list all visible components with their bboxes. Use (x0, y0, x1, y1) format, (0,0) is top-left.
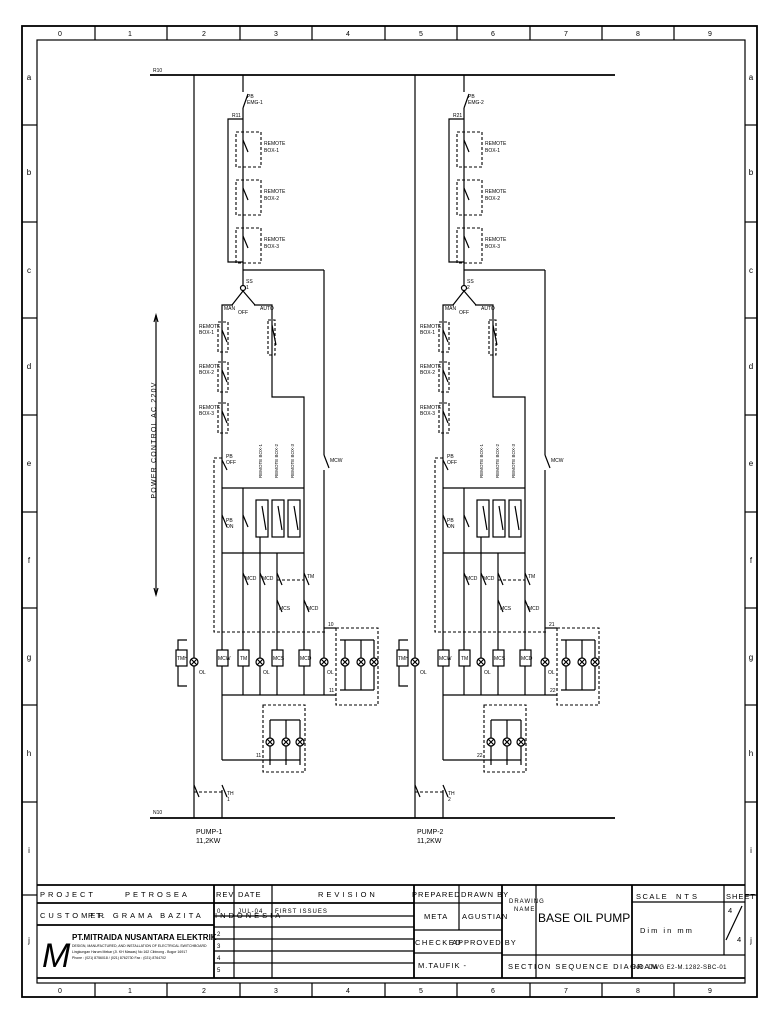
circuit: pump 2: MCD (528, 606, 540, 612)
circuit: pump 2: AUTO (481, 306, 495, 312)
circuit: pump 2: REMOTE BOX-2 (495, 443, 500, 478)
circuit: pump 2: OFF (459, 310, 469, 316)
circuit: pump 1: MCW (330, 458, 343, 464)
grid labels bottom: 3 (274, 988, 278, 995)
grid labels bottom: 0 (58, 988, 62, 995)
grid labels top: 0 (58, 31, 62, 38)
circuit: pump 2: OL (420, 670, 427, 676)
grid labels bottom: 5 (419, 988, 423, 995)
circuit: pump 2: REMOTE (420, 405, 442, 411)
circuit: pump 2: BOX-2 (485, 196, 500, 202)
circuit: pump 1: MCD (245, 576, 257, 582)
grid labels bottom: 4 (346, 988, 350, 995)
circuit: pump 2: 21 (549, 622, 555, 628)
logo (42, 933, 217, 975)
circuit: pump 2: MCD (521, 656, 533, 662)
title block: 4 (217, 956, 221, 962)
grid labels left: b (27, 168, 32, 177)
title block: JUL-04 (238, 909, 263, 915)
circuit: pump 1: PB (247, 94, 254, 100)
grid labels left: c (27, 266, 31, 275)
circuit: pump 2: BOX-3 (485, 244, 500, 250)
grid labels left: j (27, 936, 30, 945)
title block: 5 (217, 968, 221, 974)
circuit: pump 1: MCW (218, 656, 231, 662)
title block: NO. DWG E2-M.1282-SBC-01 (634, 965, 727, 971)
title block: DRAWING (509, 899, 545, 905)
title block: SHEET (726, 892, 756, 901)
circuit: pump 2: OL (548, 670, 555, 676)
circuit: pump 1: BOX-3 (264, 244, 279, 250)
circuit: pump 1: REMOTE (199, 405, 221, 411)
circuit: pump 2: 11,2KW (417, 838, 442, 845)
circuit: pump 2: REMOTE (420, 324, 442, 330)
circuit: pump 2: 22 (477, 753, 483, 759)
grid labels right: d (749, 362, 753, 371)
title block: DATE (238, 890, 261, 899)
circuit: pump 1: 1 (246, 285, 249, 291)
grid labels left: f (28, 556, 31, 565)
circuit: pump 2: R21 (453, 113, 462, 119)
bus bars: N10 (153, 810, 162, 816)
circuit: pump 1: REMOTE (264, 189, 286, 195)
grid labels right: j (749, 936, 752, 945)
circuit: pump 1: REMOTE (199, 364, 221, 370)
circuit: pump 2: OL (484, 670, 491, 676)
circuit: pump 2: MCS (494, 656, 506, 662)
title block: APPROVED BY (452, 938, 517, 947)
circuit: pump 2: PB (468, 94, 475, 100)
circuit: pump 1: REMOTE BOX-3 (290, 443, 295, 478)
circuit: pump 1: 10 (328, 622, 334, 628)
logo: Lingkungan Harum Mekar (Jl. KH Mawas) No 162 Cibinong - Bogor 16917 (72, 950, 187, 954)
grid labels right: h (749, 749, 753, 758)
circuit: pump 2: REMOTE (485, 237, 507, 243)
circuit: pump 2: REMOTE (485, 189, 507, 195)
circuit: pump 1: REMOTE BOX-1 (258, 443, 263, 478)
title block: REVISION (318, 890, 378, 899)
grid labels right: a (749, 73, 754, 82)
title block: 3 (217, 944, 221, 950)
grid labels top: 5 (419, 31, 423, 38)
circuit: pump 1: EMG-1 (247, 100, 263, 106)
title block: SECTION SEQUENCE DIAGRAM (508, 962, 659, 971)
circuit: pump 2: PB (447, 454, 454, 460)
grid labels left (27, 73, 32, 945)
grid labels top: 8 (636, 31, 640, 38)
circuit: pump 2: MCW (439, 656, 452, 662)
title block: CUSTOMER (40, 911, 107, 920)
grid labels right (749, 73, 754, 945)
circuit: pump 2: REMOTE BOX-3 (511, 443, 516, 478)
circuit: pump 2: TM (528, 574, 535, 580)
circuit: pump 1: MCD (307, 606, 319, 612)
circuit: pump 1: REMOTE (264, 237, 286, 243)
circuit: pump 2: PB (447, 518, 454, 524)
circuit: pump 1: MCD (262, 576, 274, 582)
circuit: pump 1: MCS (273, 656, 285, 662)
circuit: pump 1: MAN (224, 306, 236, 312)
circuit: pump 2: BOX-2 (420, 370, 435, 376)
title block: META (424, 912, 448, 921)
grid labels right: i (750, 846, 752, 855)
circuit: pump 1: AUTO (260, 306, 274, 312)
title block: AGUSTIAN (462, 912, 508, 921)
circuit: pump 1: 11 (329, 688, 334, 694)
title block: DRAWN BY (461, 890, 509, 899)
grid labels left: e (27, 459, 32, 468)
circuit: pump 1: REMOTE (264, 141, 286, 147)
circuit: pump 1: PUMP-1 (196, 829, 223, 836)
circuit: pump 2: REMOTE BOX-1 (479, 443, 484, 478)
grid labels top: 9 (708, 31, 712, 38)
title block: 0 (217, 909, 221, 915)
grid labels top: 3 (274, 31, 278, 38)
grid labels left: g (27, 653, 31, 662)
circuit: pump 2: MCD (466, 576, 478, 582)
grid labels right: b (749, 168, 754, 177)
circuit: pump 1: BOX-3 (199, 411, 214, 417)
title block: INDONESIA (215, 911, 283, 920)
circuit: pump 1: BOX-2 (199, 370, 214, 376)
grid labels top: 2 (202, 31, 206, 38)
circuit: pump 2: SS (467, 279, 474, 285)
circuit: pump 1: 11,2KW (196, 838, 221, 845)
title block (37, 885, 756, 978)
circuit: pump 2: MCS (500, 606, 512, 612)
grid labels bottom: 1 (128, 988, 132, 995)
title block: 4 (728, 906, 732, 915)
circuit: pump 1: R11 (232, 113, 241, 119)
circuit: pump 1: PB (226, 454, 233, 460)
circuit: pump 1: REMOTE (199, 324, 221, 330)
circuit: pump 2: MCW (551, 458, 564, 464)
circuit: pump 1: OL (199, 670, 206, 676)
circuit: pump 1: TH (227, 791, 234, 797)
circuit: pump 1: OFF (238, 310, 248, 316)
title block: PROJECT (40, 890, 96, 899)
logo: DESIGN, MANUFACTURED, AND INSTALLATION OF ELECTRICAL SWITCHBOARD (72, 944, 207, 948)
grid labels top: 1 (128, 31, 132, 38)
circuit: pump 1: 11 (256, 753, 261, 759)
circuit: pump 1: TM (240, 656, 247, 662)
grid labels bottom: 2 (202, 988, 206, 995)
logo: PT.MITRAIDA NUSANTARA ELEKTRIK (72, 933, 217, 942)
grid labels right: f (750, 556, 753, 565)
grid labels bottom: 7 (564, 988, 568, 995)
circuit: pump 2: REMOTE (420, 364, 442, 370)
grid labels top: 6 (491, 31, 495, 38)
circuit: pump 2: TM (461, 656, 468, 662)
circuit: pump 1: OFF (226, 460, 236, 466)
logo: M (42, 937, 71, 975)
circuit: pump 1: TMH (177, 656, 188, 662)
grid labels left: d (27, 362, 31, 371)
circuit: pump 1: SS (246, 279, 253, 285)
circuit: pump 1: OL (327, 670, 334, 676)
title block: Dim in mm (640, 926, 694, 935)
circuit: pump 1 (176, 75, 378, 845)
bus bars (150, 68, 615, 818)
grid labels right: g (749, 653, 753, 662)
circuit: pump 1: 1 (227, 797, 230, 803)
circuit: pump 1: PB (226, 518, 233, 524)
circuit: pump 2: BOX-1 (420, 330, 435, 336)
circuit: pump 2: OFF (447, 460, 457, 466)
title block: 4 (737, 935, 741, 944)
circuit: pump 1: MCD (300, 656, 312, 662)
title block: SCALE (636, 892, 668, 901)
circuit: pump 2: TMH (398, 656, 409, 662)
title block: CHECKED (415, 938, 462, 947)
grid labels bottom: 6 (491, 988, 495, 995)
logo: Phone : (021) 8756018 / (021) 8762730 Fax : (021) 8764702 (72, 956, 166, 960)
circuit: pump 1: OL (263, 670, 270, 676)
grid labels top (58, 31, 712, 38)
circuit: pump 2: 2 (448, 797, 451, 803)
title block: M.TAUFIK - (418, 961, 467, 970)
grid labels right: c (749, 266, 753, 275)
title block: REV (216, 890, 234, 899)
grid labels top: 4 (346, 31, 350, 38)
circuit: pump 1: ON (226, 524, 234, 530)
circuit: pump 2 (397, 75, 599, 845)
grid labels left: a (27, 73, 32, 82)
title block: PT. GRAMA BAZITA (88, 911, 204, 920)
title block: PETROSEA (125, 890, 190, 899)
grid labels left: i (28, 846, 30, 855)
circuit: pump 2: TH (448, 791, 455, 797)
bus bars: R10 (153, 68, 162, 74)
circuit: pump 1: BOX-1 (264, 148, 279, 154)
title block: 2 (217, 932, 221, 938)
title block: NTS (676, 892, 700, 901)
circuit: pump 1: BOX-2 (264, 196, 279, 202)
circuit: pump 1: BOX-1 (199, 330, 214, 336)
grid labels left: h (27, 749, 31, 758)
title block: FIRST ISSUES (275, 909, 328, 915)
grid labels bottom: 9 (708, 988, 712, 995)
grid labels right: e (749, 459, 754, 468)
title block: PREPARED (412, 890, 461, 899)
circuit: pump 2: REMOTE (485, 141, 507, 147)
circuit: pump 2: 22 (550, 688, 556, 694)
power control label: POWER CONTROL AC 220V (151, 381, 158, 499)
circuit: pump 2: ON (447, 524, 455, 530)
grid labels top: 7 (564, 31, 568, 38)
circuit: pump 1: MCS (279, 606, 291, 612)
power control label (151, 315, 158, 595)
circuit: pump 2: EMG-2 (468, 100, 484, 106)
grid labels bottom: 8 (636, 988, 640, 995)
circuit: pump 2: BOX-1 (485, 148, 500, 154)
title block: NAME (514, 907, 535, 913)
grid labels bottom (58, 988, 712, 995)
circuit: pump 1: REMOTE BOX-2 (274, 443, 279, 478)
circuit: pump 2: PUMP-2 (417, 829, 444, 836)
circuit: pump 2: MAN (445, 306, 456, 312)
circuit: pump 1: TM (307, 574, 314, 580)
title block: BASE OIL PUMP (538, 911, 630, 925)
circuit: pump 2: 2 (467, 285, 470, 291)
circuit: pump 2: MCD (483, 576, 495, 582)
circuit: pump 2: BOX-3 (420, 411, 435, 417)
